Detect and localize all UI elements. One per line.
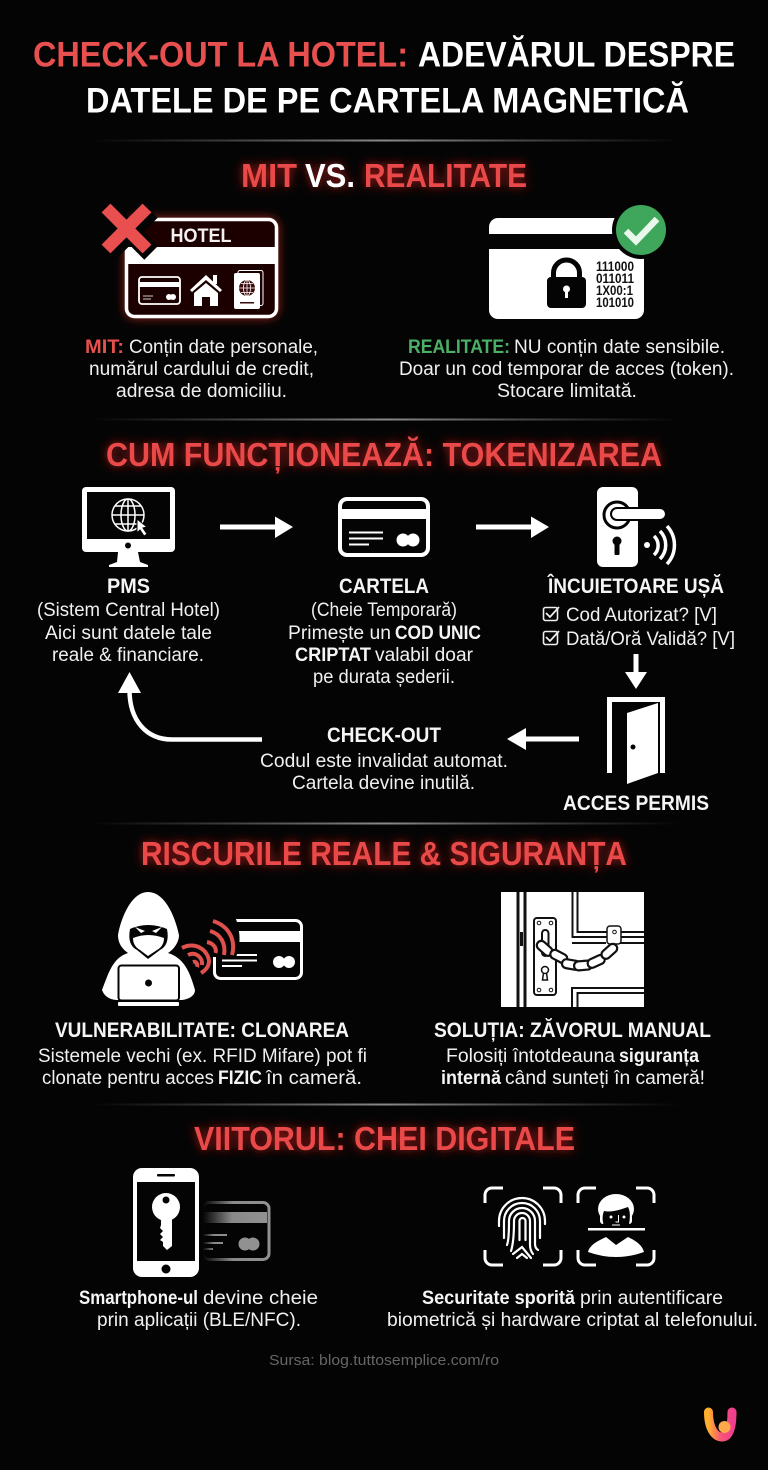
icon: secure card with token: 1X00:1 <box>596 283 633 298</box>
text: vulnerabilitate <box>38 1019 367 1089</box>
text: solutia: când sunteți în cameră! <box>505 1068 705 1089</box>
heading: riscuri: RISCURILE REALE & SIGURANȚA <box>141 835 627 872</box>
step: incuietoare: Cod Autorizat? [V] <box>566 605 717 626</box>
panel: riscuri <box>38 835 711 1089</box>
text: mit: MIT: <box>85 337 124 358</box>
text: realitate: Doar un cod temporar de acces (token). <box>399 359 734 380</box>
icon: secure card with token: 111000 <box>596 259 634 274</box>
arrow: lock to door <box>625 654 647 689</box>
step: incuietoare: Dată/Oră Validă? [V] <box>566 629 735 650</box>
text: realitate: Stocare limitată. <box>497 381 637 402</box>
step: incuietoare <box>544 574 735 650</box>
icon: secure card with token <box>489 201 670 319</box>
step: pms: PMS <box>107 575 150 598</box>
heading: viitorul: VIITORUL: CHEI DIGITALE <box>194 1120 575 1157</box>
step: check-out: CHECK-OUT <box>327 724 441 747</box>
text: mit: Conțin date personale, <box>129 337 318 358</box>
text: mit <box>85 337 318 402</box>
text: mit: adresa de domiciliu. <box>116 381 287 402</box>
text: realitate: REALITATE: <box>408 337 510 358</box>
step: cartela: valabil doar <box>375 645 474 666</box>
text: solutia: SOLUȚIA: ZĂVORUL MANUAL <box>434 1019 711 1042</box>
icon: door chain <box>501 892 644 1007</box>
source: Sursa: blog.tuttosemplice.com/ro <box>269 1353 499 1369</box>
heading: mit vs realitate: VS. <box>305 157 355 194</box>
arrow: door to check-out <box>507 728 579 750</box>
text: securitate: biometrică și hardware criptat al telefonului. <box>387 1310 758 1331</box>
text: mit: numărul cardului de credit, <box>89 359 314 380</box>
step: check-out <box>260 724 508 794</box>
step: incuietoare: ÎNCUIETOARE UȘĂ <box>547 574 724 598</box>
step: pms: (Sistem Central Hotel) <box>37 600 220 621</box>
icon: red cross <box>106 208 151 253</box>
title: ADEVĂRUL DESPRE <box>418 36 735 74</box>
icon: monitor <box>82 487 175 567</box>
text: solutia: siguranța <box>619 1046 699 1067</box>
icon: fingerprint scan <box>485 1188 561 1265</box>
icon: secure card with token: 011011 <box>596 271 634 286</box>
text: securitate: prin autentificare <box>580 1288 723 1309</box>
icon: secure card with token: 101010 <box>596 295 634 310</box>
step: cartela: CARTELA <box>339 575 429 598</box>
arrow: card to lock <box>476 516 549 538</box>
title: DATELE DE PE CARTELA MAGNETICĂ <box>86 82 689 120</box>
text: securitate <box>387 1288 758 1331</box>
heading: mit vs realitate: MIT <box>241 157 297 194</box>
text: solutia <box>434 1019 711 1089</box>
arrow: check-out back to pms <box>118 672 262 740</box>
text: realitate: NU conțin date sensibile. <box>514 337 725 358</box>
heading: mit vs realitate: REALITATE <box>364 157 527 194</box>
icon: hotel card with personal data: HOTEL <box>170 225 232 247</box>
title: CHECK-OUT LA HOTEL: <box>33 36 408 74</box>
icon: hotel card with personal data <box>126 220 277 316</box>
text: realitate <box>399 337 734 402</box>
step: cartela <box>288 575 481 688</box>
icon: card <box>339 499 429 555</box>
step: check-out: Codul este invalidat automat. <box>260 751 508 772</box>
step: cartela: CRIPTAT <box>295 645 371 666</box>
icon: smartphone key and fading card <box>133 1168 269 1277</box>
text: vulnerabilitate: Sistemele vechi (ex. RFID Mifare) pot fi <box>38 1046 367 1067</box>
text: vulnerabilitate: clonate pentru acces <box>42 1068 214 1089</box>
step: pms: reale & financiare. <box>52 645 204 666</box>
text: smartphone: prin aplicații (BLE/NFC). <box>97 1310 301 1331</box>
text: securitate: Securitate sporită <box>422 1288 575 1309</box>
panel: viitorul <box>79 1120 758 1331</box>
step: cartela: (Cheie Temporară) <box>311 600 457 621</box>
heading: tokenizare: CUM FUNCȚIONEAZĂ: TOKENIZAREA <box>106 436 662 473</box>
text: solutia: internă <box>441 1068 501 1089</box>
text: vulnerabilitate: în cameră. <box>265 1068 362 1089</box>
text: smartphone: devine cheie <box>203 1288 318 1309</box>
step: cartela: Primește un <box>288 623 391 644</box>
icon: face scan <box>578 1188 654 1265</box>
step: pms <box>37 575 220 666</box>
title <box>33 36 735 120</box>
logo <box>708 1412 732 1437</box>
panel: tokenizare <box>37 436 735 815</box>
icon: open door <box>610 700 662 784</box>
step: cartela: pe durata șederii. <box>313 667 455 688</box>
step: pms: Aici sunt datele tale <box>45 623 212 644</box>
panel: mit vs realitate <box>85 157 734 402</box>
text: smartphone: Smartphone-ul <box>79 1288 198 1309</box>
text: smartphone <box>79 1288 318 1331</box>
icon: door lock <box>597 487 674 567</box>
arrow: pms to card <box>220 516 293 538</box>
icon: hacker cloning card <box>102 892 302 1006</box>
text: vulnerabilitate: VULNERABILITATE: CLONAREA <box>55 1019 349 1042</box>
step: check-out: Cartela devine inutilă. <box>292 773 475 794</box>
text: vulnerabilitate: FIZIC <box>218 1068 262 1089</box>
heading: mit vs realitate <box>241 157 527 194</box>
step: cartela: COD UNIC <box>395 623 481 644</box>
text: solutia: Folosiți întotdeauna <box>446 1046 615 1067</box>
label: acces permis: ACCES PERMIS <box>563 792 709 815</box>
